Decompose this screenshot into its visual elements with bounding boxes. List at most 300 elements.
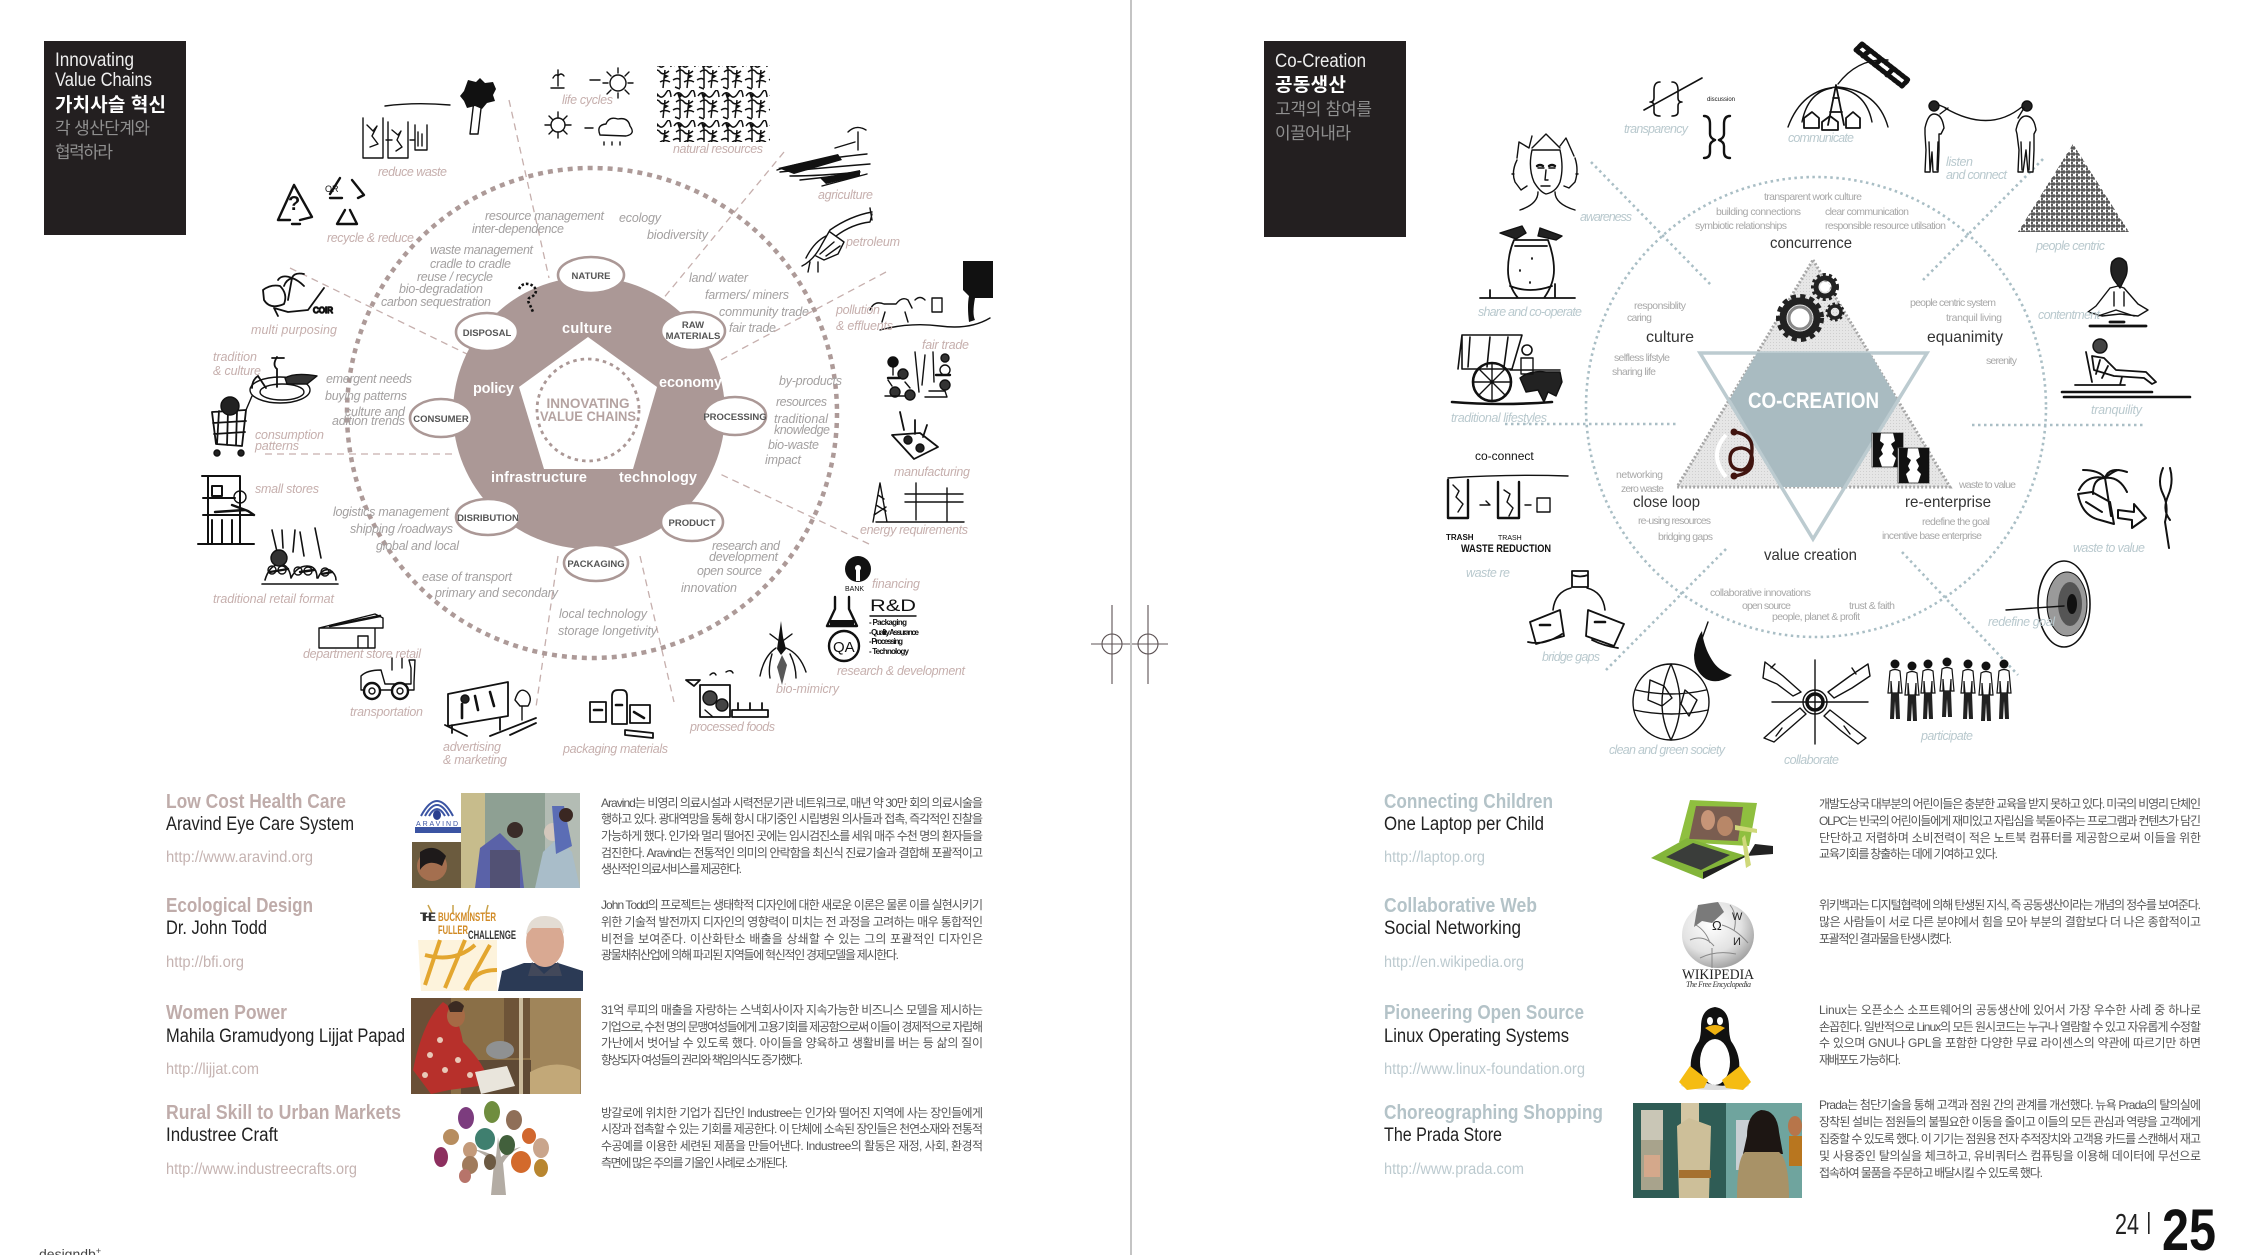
detail labels: trust & faith (1849, 600, 1895, 612)
sketch: waste reduction: WASTE REDUCTION (1461, 543, 1551, 555)
sketch labels: collaborate (1784, 753, 1839, 767)
outer dotted ring (347, 168, 837, 658)
virtue labels: equanimity (1927, 329, 2003, 346)
description: wikipedia: 포괄적인 결과물을 탄생시켰다. (1819, 932, 1952, 946)
inner text labels: buying patterns (325, 389, 407, 403)
detail labels: clear communication (1825, 206, 1909, 218)
sketch: bridge gaps (1528, 571, 1624, 648)
sketch labels: tradition (213, 350, 257, 364)
sketch: clean and green globe (1633, 622, 1732, 740)
sketch: r and d: R&D (870, 596, 916, 615)
inner text labels: carbon sequestration (381, 295, 491, 309)
sketch: multi purposing coir (263, 274, 333, 316)
sketch labels: traditional retail format (213, 592, 335, 606)
sketch: waste reduction: TRASH (1498, 535, 1522, 542)
sketch labels: manufacturing (894, 465, 970, 479)
sketch labels: recycle & reduce (327, 231, 414, 245)
sketch: share and cooperate jar (1480, 226, 1575, 298)
sketch: agriculture (777, 127, 870, 186)
virtue labels: close loop (1633, 494, 1700, 511)
inner text labels: local technology (559, 607, 648, 621)
case: women power: Women Power (166, 1002, 287, 1024)
description: olpc: OLPC는 빈국의 어린이들에게 재미있고 자립심을 북돋아주는 프로그램과 컨텐츠가 담긴 (1819, 814, 2201, 828)
sketch: department store (319, 614, 383, 648)
panel: co-creation page (1264, 41, 2216, 1255)
case: connecting children: Connecting Children (1384, 791, 1553, 813)
sketch: transportation (361, 658, 415, 699)
photo: prada store (1633, 1103, 1802, 1198)
sketch labels: clean and green society (1609, 743, 1726, 757)
sketch: waste to value palm (2078, 468, 2172, 548)
icon: close loop (1717, 428, 1752, 480)
description: aravind: 행하고 있다. 광대역망을 통해 항시 대기중인 시립병원 의사들과 접촉, 즉각적인 진찰을 (601, 811, 983, 826)
sketch labels: patterns (254, 439, 299, 453)
detail labels: re-using resources (1638, 515, 1711, 527)
sketch: advertising (445, 682, 536, 736)
case: collaborative web (1384, 895, 2201, 989)
case: rural skill to urban markets: http://www.industreecrafts.org (166, 1161, 357, 1178)
sketch labels: research & development (837, 664, 966, 678)
photo: buckminster fuller challenge: BUCKMINSTER (438, 910, 496, 924)
sketch labels: petroleum (845, 235, 900, 249)
inner text labels: by-products (779, 374, 842, 388)
diagram: co-creation wheel (1446, 44, 2190, 767)
case: collaborative web: Social Networking (1384, 918, 1521, 939)
case: rural skill to urban markets: Industree Craft (166, 1125, 279, 1146)
inner dotted ring (537, 359, 639, 461)
diagram: value chain wheel (198, 66, 993, 767)
stage labels: NATURE (572, 271, 610, 282)
description: aravind: 가능하게 했다. 인가와 멀리 떨어진 곳에는 임시검진소를 세워 매주 수천 명의 환자들을 (601, 828, 983, 843)
sketch: collaborate hands (1763, 660, 1870, 744)
page divider and registration marks (1091, 0, 1168, 1255)
detail labels: symbiotic relationships (1695, 220, 1787, 232)
case: rural skill to urban markets (166, 1101, 983, 1195)
stage labels: MATERIALS (666, 331, 720, 342)
description: linux (1819, 1003, 2201, 1067)
description: john todd: 위한 기술적 발전까지 디자인의 영향력이 미치는 전 과정을 고려하는 매우 통합적인 (601, 915, 983, 929)
description: linux: 손꼽힌다. 일반적으로 Linux의 모든 원시코드는 누구나 열람할 수 있고 자유롭게 수정할 (1819, 1020, 2201, 1034)
sketch labels (213, 93, 970, 767)
inner text labels: waste management (430, 243, 534, 257)
case: ecological design: http://bfi.org (166, 954, 244, 971)
title box left: 가치사슬 혁신 (55, 94, 166, 116)
image: olpc laptop (1651, 800, 1773, 879)
sketch labels: awareness (1580, 210, 1632, 224)
photo: buckminster fuller challenge: FULLER (438, 923, 468, 937)
photo: aravind: ARAVIND (416, 821, 458, 828)
case studies right (1384, 791, 2201, 1198)
photo: aravind (412, 793, 580, 888)
title box left: Innovating (55, 50, 134, 71)
detail labels: caring (1627, 312, 1652, 324)
title box left: Value Chains (55, 70, 152, 91)
description: lijjat (601, 1003, 983, 1067)
title box right (1264, 41, 1406, 237)
title box right: 이끌어내라 (1275, 124, 1351, 143)
case: ecological design (166, 895, 983, 991)
sketch labels: life cycles (562, 93, 613, 107)
inner text labels: cradle to cradle (430, 257, 511, 271)
sketch: transparency braces (1644, 78, 1735, 158)
title box left: 협력하라 (55, 143, 113, 162)
sketch: awareness faces (1512, 134, 1578, 210)
central disc (453, 277, 725, 549)
inner text labels: traditional (774, 412, 829, 426)
sketch labels: communicate (1788, 131, 1854, 145)
case: pioneering open source (1384, 1002, 2201, 1090)
case: choreographing shopping (1384, 1098, 2201, 1198)
inner text labels: knowledge (774, 423, 830, 437)
sketch labels: waste to value (2073, 541, 2145, 555)
sketch labels: fair trade (922, 338, 969, 352)
sketch labels: listen (1946, 155, 1973, 169)
sketch: financing bank logo: BANK (845, 586, 864, 593)
description: prada: 및 사용중인 탈의실을 체크하고, 유비쿼터스 컴퓨팅을 이용해 데이터에 무선으로 (1819, 1149, 2201, 1163)
sketch: r and d: QA (833, 639, 855, 656)
stage labels: DISPOSAL (463, 328, 511, 339)
detail labels: collaborative innovations (1710, 587, 1811, 599)
photo: buckminster fuller challenge (415, 902, 583, 991)
sketch labels: redefine goal (1988, 615, 2056, 629)
sketch labels: & marketing (443, 753, 507, 767)
inner text labels: adition trends (332, 414, 405, 428)
inner text labels: culture and (345, 405, 406, 419)
sketch: recycle: ? (288, 193, 300, 215)
sketch labels: & culture (213, 364, 261, 378)
case: ecological design: Dr. John Todd (166, 918, 267, 939)
description: wikipedia: 위키백과는 디지털협력에 의해 탄생된 지식, 즉 공동생산이라는 개념의 정수를 보여준다. (1819, 898, 2201, 912)
sketch labels: consumption (255, 428, 324, 442)
inner text labels: bio-waste (768, 438, 819, 452)
sketch labels: traditional lifestyles (1451, 411, 1547, 425)
sketch: waste reduction: TRASH (1446, 533, 1474, 542)
sketch labels: packaging materials (562, 742, 668, 756)
sketch labels: processed foods (689, 720, 775, 734)
upward triangle (1677, 260, 1950, 487)
description: john todd: John Todd의 프로젝트는 생태학적 디자인에 대한 새로운 이론은 물론 이를 실현시키기 (601, 898, 983, 912)
sketch: processed foods (686, 671, 768, 717)
case: collaborative web: http://en.wikipedia.org (1384, 954, 1524, 971)
case: ecological design: Ecological Design (166, 895, 313, 917)
inner text labels: bio-degradation (399, 282, 483, 296)
case: women power: Mahila Gramudyong Lijjat Papad (166, 1026, 405, 1047)
detail labels: tranquil living (1946, 312, 2002, 324)
inner text labels: global and local (376, 539, 460, 553)
description: linux: Linux는 오픈소스 소프트웨어의 공동생산에 있어서 가장 우수한 사례 중 하나로 (1819, 1003, 2201, 1017)
description: linux: 재배포도 가능하다. (1819, 1053, 1901, 1067)
outer dotted ring (1586, 177, 2046, 637)
sketch labels: waste re (1466, 566, 1510, 580)
sketch: recycle (278, 178, 364, 224)
inner text labels: biodiversity (647, 228, 709, 242)
sketch: packaging materials (590, 690, 653, 738)
sketch: tranquility (2062, 339, 2190, 397)
inner text labels: resource management (485, 209, 605, 223)
sketch labels: tranquility (2091, 403, 2143, 417)
virtue labels: culture (1646, 329, 1694, 346)
sketch: small stores (198, 476, 254, 544)
page number: 24 (2115, 1209, 2139, 1241)
sketch: r and d: - Packaging (869, 618, 907, 627)
case: collaborative web: Collaborative Web (1384, 895, 1537, 917)
inner text labels: storage longetivity (558, 624, 658, 638)
sketch: natural resources (657, 66, 770, 142)
sketch labels: bio-mimicry (776, 682, 840, 696)
case: connecting children (1384, 791, 2201, 879)
case: choreographing shopping: http://www.prada.com (1384, 1161, 1524, 1178)
sketch labels: bridge gaps (1542, 650, 1600, 664)
inner text labels: reuse / recycle (417, 270, 493, 284)
description: john todd (601, 898, 983, 962)
inner text labels: ease of transport (422, 570, 513, 584)
case: connecting children: One Laptop per Child (1384, 814, 1544, 835)
sketch labels: transportation (350, 705, 423, 719)
detail labels: incentive base enterprise (1882, 530, 1982, 542)
hexagon overlap (1730, 353, 1897, 487)
description: prada: 집중할 수 있도록 했다. 이 기기는 점원용 전자 추적장치와 고객용 카드를 스캔해서 재고 (1819, 1132, 2201, 1146)
inner text labels: impact (765, 453, 802, 467)
sketch: multi purposing coir: COIR (313, 306, 333, 315)
stage labels: PRODUCT (669, 518, 716, 529)
inner text labels: community trade (719, 305, 809, 319)
sketch labels: natural resources (673, 142, 763, 156)
spokes (1505, 159, 2145, 675)
stage labels: PROCESSING (703, 412, 767, 423)
description: john todd: 광물채취산업에 의해 파괴된 지역들에 혁신적인 경제모델을 제시한다. (601, 948, 899, 962)
sketch: listen and connect (1925, 101, 2036, 172)
description: prada (1819, 1098, 2201, 1180)
description: aravind: 검진한다. Aravind는 전통적인 의미의 안락함을 최신식 진료기술과 결합해 포괄적이고 (601, 846, 983, 860)
description: prada: 접속하여 물품을 주문하고 배달시킬 수 있도록 했다. (1819, 1166, 2043, 1180)
description: lijjat: 가난에서 벗어날 수 있도록 했다. 아이들을 양육하고 생활비를 버는 등 삶의 질이 (601, 1036, 983, 1050)
sketch: tradition plate (250, 357, 317, 403)
sketch labels: share and co-operate (1478, 305, 1582, 319)
description: john todd: 비전을 보여준다. 이산화탄소 배출을 상쇄할 수 있는 그의 포괄적인 디자인은 (601, 932, 983, 946)
description: industree: 측면에 많은 주의를 기울인 사례로 소개된다. (601, 1156, 788, 1170)
sketch labels: people centric (2035, 239, 2106, 253)
detail labels: building connections (1716, 206, 1801, 218)
sketch: bio-mimicry (760, 621, 806, 685)
sketch: manufacturing (892, 412, 938, 459)
description: linux: 수 있으며 GNU나 GPL을 포함한 다양한 무료 라이센스의 약관에 따르기만 하면 (1819, 1035, 2201, 1050)
case studies left (166, 791, 983, 1195)
case: rural skill to urban markets: Rural Skill to Urban Markets (166, 1102, 401, 1124)
image: wikipedia globe: W (1732, 911, 1743, 923)
photo: lijjat (411, 998, 581, 1094)
detail labels: sharing life (1612, 366, 1656, 378)
sketch: energy (873, 483, 964, 522)
stage labels: DISRIBUTION (457, 513, 519, 524)
inner text labels (325, 209, 842, 638)
case: low cost health care: Aravind Eye Care System (166, 814, 354, 835)
case: pioneering open source: Pioneering Open Source (1384, 1002, 1584, 1024)
sketch: traditional cart (1452, 335, 1562, 404)
title box right: 고객의 참여를 (1275, 100, 1372, 119)
sketch labels: multi purposing (251, 323, 337, 337)
sketch: fair trade (885, 352, 950, 400)
page number (2115, 1198, 2216, 1255)
sketch labels: department store retail (303, 647, 422, 661)
title box left: 각 생산단계와 (55, 119, 150, 138)
case: low cost health care: Low Cost Health Care (166, 791, 346, 813)
detail labels: responsiblity (1634, 300, 1687, 312)
sketch labels: agriculture (818, 188, 873, 202)
virtue labels (1633, 235, 2003, 564)
sketch: pollution (870, 261, 993, 330)
icon: gears (1779, 275, 1843, 339)
sketch: communicate (1788, 44, 1908, 130)
sketch: r and d: - Processing (869, 637, 903, 646)
detail labels: people centric system (1910, 297, 1996, 309)
detail labels: people, planet & profit (1772, 611, 1860, 623)
image: wikipedia globe (1682, 902, 1754, 989)
description: wikipedia (1819, 898, 2201, 946)
stage labels: RAW (682, 320, 704, 331)
sketch labels: small stores (255, 482, 319, 496)
description: olpc: 개발도상국 대부분의 어린이들은 충분한 교육을 받지 못하고 있다. 미국의 비영리 단체인 (1819, 797, 2201, 811)
sketch: consumption cart (212, 396, 252, 456)
disc labels: technology (619, 470, 697, 486)
center label: INNOVATING (546, 395, 630, 411)
disc labels: policy (473, 381, 514, 397)
detail labels: redefine the goal (1922, 516, 1990, 528)
description: olpc: 단단하고 저렴하며 소비전력이 적은 노트북 컴퓨터를 제공함으로써 이들을 위한 (1819, 831, 2201, 845)
sketch: petroleum (802, 208, 872, 272)
description: industree: 수공예를 이용한 세련된 제품을 만들어낸다. Industree의 활동은 재정, 사회, 환경적 (601, 1139, 983, 1153)
inner text labels: land/ water (689, 271, 749, 285)
description: prada: Prada는 첨단기술을 통해 고객과 점원 간의 관계를 개선했다. 뉴욕 Prada의 탈의실에 (1819, 1098, 2201, 1112)
disc labels (473, 321, 722, 486)
detail labels: serenity (1986, 355, 2018, 367)
sketch: participate people (1888, 658, 2011, 721)
description: olpc (1819, 797, 2201, 861)
question mark dashes (519, 284, 536, 312)
inner text labels: inter-dependence (472, 222, 564, 236)
description: wikipedia: 많은 사람들이 서로 다른 분야에서 힘을 모아 부분의 결합보다 더 나은 종합적이고 (1819, 915, 2201, 929)
sketch: waste reduction (1446, 449, 1568, 555)
sketch: target redefine goal (2006, 561, 2090, 647)
virtue labels: re-enterprise (1905, 494, 1991, 511)
detail labels: bridging gaps (1658, 531, 1713, 543)
case: women power: http://lijjat.com (166, 1061, 259, 1078)
description: industree: 방갈로에 위치한 기업가 집단인 Industree는 인가와 떨어진 지역에 사는 장인들에게 (601, 1106, 983, 1120)
sketch labels (1451, 122, 2145, 767)
description: industree (601, 1106, 983, 1170)
sketch labels: energy requirements (860, 523, 968, 537)
description: aravind: 생산적인 의료서비스를 제공한다. (601, 862, 742, 876)
image: wikipedia globe: WIKIPEDIA (1682, 967, 1754, 983)
sketch labels: contentment (2038, 308, 2101, 322)
sketch: reduce waste (363, 78, 496, 158)
virtue labels: value creation (1764, 547, 1857, 564)
sketch labels: & effluents (836, 319, 893, 333)
virtue labels: concurrence (1770, 235, 1852, 252)
stage ellipses (410, 257, 766, 581)
sketch: recycle: OR (325, 184, 339, 194)
photo: buckminster fuller challenge: THE (420, 910, 436, 924)
inner text labels: open source (697, 564, 762, 578)
inner text labels: innovation (681, 581, 737, 595)
sketch: r and d (827, 596, 920, 661)
sketch labels: financing (872, 577, 920, 591)
sketch labels: pollution (835, 303, 880, 317)
description: industree: 시장과 접촉할 수 있는 기회를 제공한다. 이 단체에 소속된 장인들은 천연소재와 전통적 (601, 1121, 983, 1136)
detail labels: transparent work culture (1764, 191, 1862, 203)
center label: VALUE CHAINS (540, 408, 636, 424)
stage labels: CONSUMER (413, 414, 469, 425)
inner text labels: research and (712, 539, 781, 553)
case: connecting children: http://laptop.org (1384, 849, 1485, 866)
sketch: traditional market (262, 528, 338, 584)
inner text labels: resources (776, 395, 827, 409)
panel: innovating value chains page (39, 41, 993, 1255)
sketch: waste reduction: co-connect (1475, 449, 1534, 463)
title box left (44, 41, 186, 235)
sketch: transparency braces: discussion (1707, 97, 1735, 103)
sketch: financing bank logo (845, 556, 871, 593)
inner text labels: primary and secondary (434, 586, 559, 600)
image: wikipedia globe: The Free Encyclopedia (1686, 980, 1751, 989)
co-creation label: CO-CREATION (1748, 388, 1879, 413)
inner text labels: farmers/ miners (705, 288, 789, 302)
image: tux penguin (1679, 1007, 1751, 1090)
case: choreographing shopping: Choreographing Shopping (1384, 1102, 1603, 1124)
case: pioneering open source: http://www.linux-foundation.org (1384, 1061, 1585, 1078)
sketch: people centric pyramid (2018, 144, 2129, 232)
detail labels (1612, 191, 2018, 623)
description: olpc: 교육기회를 창출하는 데에 기여하고 있다. (1819, 847, 1998, 861)
disc labels: infrastructure (491, 470, 587, 486)
photo: buckminster fuller challenge: CHALLENGE (468, 928, 516, 942)
case: women power (166, 998, 983, 1094)
image: wikipedia globe: И (1733, 936, 1741, 948)
detail labels: responsible resource utilsation (1825, 220, 1946, 232)
description: lijjat: 향상되자 여성들의 권리와 책임의식도 증가했다. (601, 1052, 803, 1067)
sketch labels: participate (1920, 729, 1973, 743)
disc labels: culture (562, 321, 612, 337)
sketch: life cycles (545, 68, 633, 145)
image: wikipedia globe: Ω (1712, 918, 1722, 933)
inner text labels: emergent needs (326, 372, 412, 386)
description: aravind (601, 795, 983, 876)
case: choreographing shopping: The Prada Store (1384, 1125, 1502, 1146)
sketch labels: advertising (443, 740, 501, 754)
case: low cost health care (166, 791, 983, 888)
spokes (265, 100, 886, 707)
inner text labels: fair trade (729, 321, 776, 335)
case: pioneering open source: Linux Operating Systems (1384, 1026, 1569, 1047)
case: low cost health care: http://www.aravind.org (166, 849, 313, 866)
downward triangle (1700, 353, 1927, 539)
description: lijjat: 31억 루피의 매출을 자랑하는 스낵회사이자 지속가능한 비즈니스 모델을 제시하는 (601, 1003, 983, 1017)
detail labels: waste to value (1958, 479, 2016, 491)
inner text labels: development (709, 550, 779, 564)
detail labels: open source (1742, 600, 1791, 612)
title box right: Co-Creation (1275, 51, 1366, 72)
inner text labels: ecology (619, 211, 662, 225)
title box right: 공동생산 (1275, 74, 1346, 96)
pentagon (519, 337, 657, 469)
description: prada: 장착된 설비는 점원들의 불필요한 이동을 줄이고 이들의 모든 관심과 역량을 고객에게 (1819, 1115, 2201, 1129)
sketch labels: transparency (1624, 122, 1689, 136)
center label (540, 395, 636, 424)
icon: faces (1872, 433, 1929, 483)
stage labels (413, 271, 767, 570)
sketch: r and d: - Technology (869, 647, 910, 656)
sketch: r and d: - Quality Assurance (869, 628, 920, 637)
sketch labels: and connect (1946, 168, 2008, 182)
